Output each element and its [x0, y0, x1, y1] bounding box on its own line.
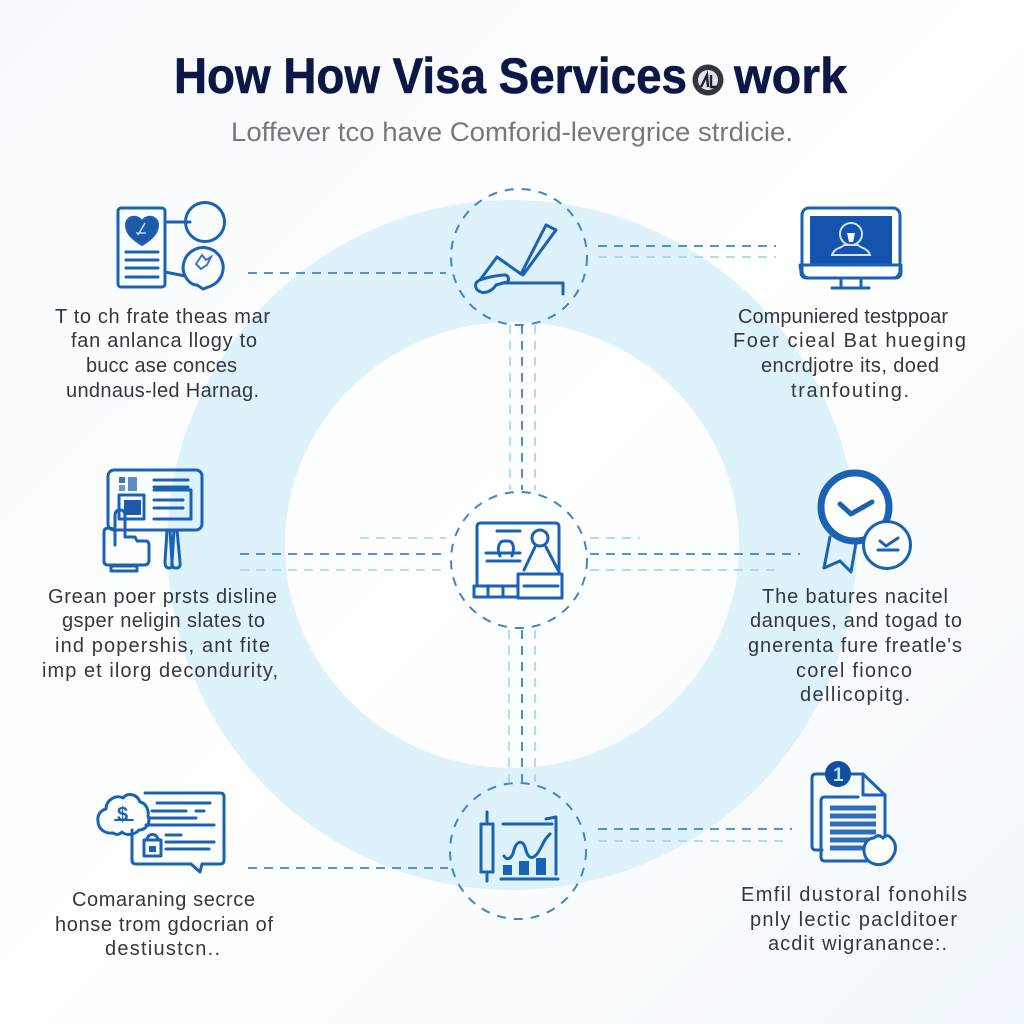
text block: top left: bucc ase conces [86, 355, 237, 377]
text block: middle right: gnerenta fure freatle's [748, 635, 962, 657]
title: work [733, 48, 847, 104]
title: How How Visa Services [174, 48, 687, 104]
text block: bottom left: destiustcn.. [105, 938, 220, 960]
icon: monitor with person [800, 208, 901, 288]
panel: bottom left [55, 793, 273, 960]
icon: chat bubble with money cloud [98, 793, 224, 872]
icon: documents with numbered badge [812, 761, 895, 865]
icon: chat bubble with money cloud: $ [117, 804, 128, 826]
icon: visa counter with person [474, 523, 562, 598]
text block: bottom right: pnly lectic paclditoer [750, 909, 957, 931]
text block: middle right: dellicopitg. [800, 684, 910, 706]
background ring [167, 200, 857, 890]
icon: award ribbon with check [821, 473, 910, 572]
text block: bottom right [741, 884, 967, 955]
text block: top right: Foer cieal Bat hueging [733, 330, 966, 352]
text block: middle right: corel fionco [796, 660, 912, 682]
text block: bottom left: honse trom gdocrian of [55, 914, 273, 936]
text block: bottom right: acdit wigranance:. [768, 933, 947, 955]
panel: bottom right [741, 761, 967, 955]
icon: ramp with pen [476, 225, 563, 294]
text block: middle left [42, 586, 278, 682]
text block: bottom left [55, 889, 273, 960]
text block: top left: fan anlanca llogy to [71, 330, 257, 352]
text block: middle left: gsper neligin slates to [62, 610, 265, 632]
text block: top right: Compuniered testppoar [738, 306, 948, 328]
text block: top left: undnaus-led Harnag. [66, 380, 259, 402]
text block: middle right: The batures nacitel [762, 586, 948, 608]
text block: top left: T to ch frate theas mar [55, 306, 270, 328]
icon: candlestick and growth chart [481, 812, 558, 881]
text block: top right [733, 306, 966, 402]
text block: bottom right: Emfil dustoral fonohils [741, 884, 967, 906]
node: middle circle [451, 492, 587, 628]
panel: top right [733, 208, 966, 402]
icon: title emblem [692, 64, 724, 96]
text block: middle right: danques, and togad to [750, 610, 962, 632]
node: bottom circle [450, 783, 586, 919]
node: top circle [451, 189, 587, 325]
text block: middle left: Grean poer prsts disline [48, 586, 277, 608]
panel: middle left [42, 470, 278, 682]
text block: top left [55, 306, 270, 402]
text block: top right: encrdjotre its, doed [761, 355, 939, 377]
panel: top left [55, 202, 270, 402]
connector lines [240, 246, 800, 868]
text block: bottom left: Comaraning secrce [72, 889, 255, 911]
subtitle: Loffever tco have Comforid-levergrice strdicie. [231, 117, 793, 147]
text block: middle left: imp et ilorg decondurity, [42, 660, 278, 682]
icon: presentation board with hand [104, 470, 202, 571]
icon: documents with numbered badge: 1 [833, 765, 844, 786]
text block: top right: tranfouting. [791, 380, 909, 402]
text block: middle left: ind popershis, ant fite [55, 635, 270, 657]
text block: middle right [748, 586, 962, 706]
panel: middle right [748, 473, 962, 706]
icon: document with heart and bubbles [118, 202, 224, 289]
